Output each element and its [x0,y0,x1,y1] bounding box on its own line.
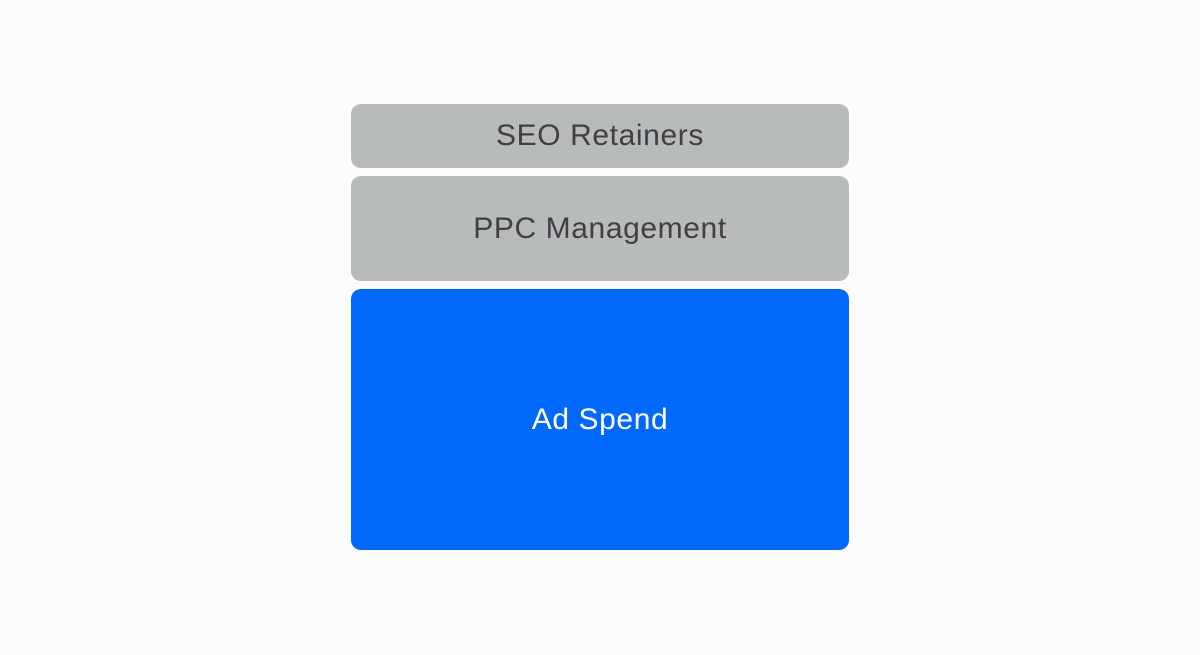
block: Ad Spend [351,289,849,550]
block: PPC Management: PPC Management [473,212,727,244]
block: SEO Retainers: SEO Retainers [496,119,704,152]
block: Ad Spend: Ad Spend [532,402,668,436]
block: PPC Management [351,176,849,281]
stacked block diagram [351,104,849,550]
block: SEO Retainers [351,104,849,168]
